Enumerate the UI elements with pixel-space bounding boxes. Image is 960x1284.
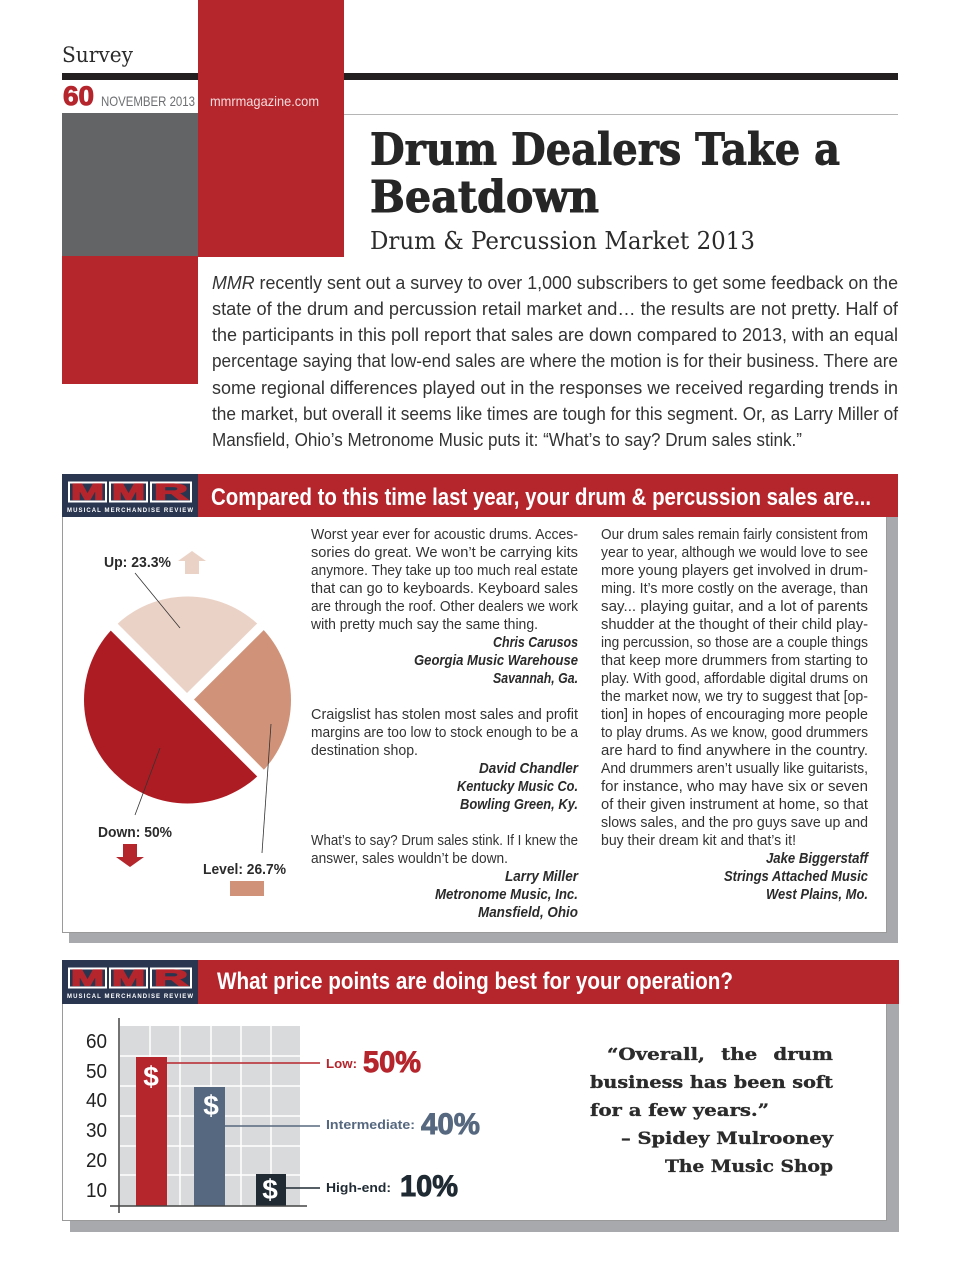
callout: low 50%: 50% (363, 1046, 421, 1079)
comment: Jake Biggerstaff: buy their dream kit and that’s it! (601, 832, 796, 849)
comment: Jake Biggerstaff: And drummers aren’t usually like guitarists, (601, 760, 868, 777)
callout: low 50% (167, 1046, 421, 1079)
bar: low (136, 1057, 167, 1206)
comment: David Chandler: destination shop. (311, 742, 418, 759)
pull quote: The Music Shop (665, 1157, 833, 1177)
label: down: Down: 50% (98, 824, 172, 841)
comment: Jake Biggerstaff (601, 526, 870, 903)
comment: Larry Miller: Metronome Music, Inc. (435, 886, 578, 903)
panel shadow (69, 517, 898, 943)
comment: David Chandler: Craigslist has stolen most sales and profit (311, 706, 579, 723)
comment: Larry Miller: What’s to say? Drum sales stink. If I knew the (311, 832, 578, 849)
panel box (62, 474, 886, 932)
comment: Jake Biggerstaff: say... playing guitar, and a lot of parents (601, 598, 868, 615)
section label: Survey: Survey (62, 43, 133, 67)
comment: David Chandler: Bowling Green, Ky. (460, 796, 578, 813)
comment: Jake Biggerstaff: more young players get involved in drum- (601, 562, 868, 579)
callout: high-end 10% (286, 1170, 458, 1203)
bar: high-end: $ (262, 1174, 278, 1205)
title (370, 124, 840, 223)
comment: Jake Biggerstaff: tion] in hopes of encouraging more people (601, 706, 868, 723)
comment: Chris Carusos: Savannah, Ga. (493, 670, 578, 687)
comment: Larry Miller: answer, sales wouldn’t be down. (311, 850, 508, 867)
heading bar (198, 474, 898, 517)
comment: Jake Biggerstaff: of their given instrument at home, so that (601, 796, 869, 813)
axis labels: 60 (86, 1031, 107, 1053)
comment: Jake Biggerstaff: Strings Attached Music (724, 868, 869, 885)
intro paragraph: the market, but overall it seems like times are tough for this segment. Or, as Larry Miller of (212, 403, 899, 424)
decorative block: tall red with website (198, 0, 344, 257)
MMR logo: M (112, 480, 145, 504)
pull quote (590, 1045, 834, 1177)
intro paragraph: the participants in this poll report that sales are down compared to 2013, with an equal (212, 324, 898, 345)
pull quote: “Overall, the drum (607, 1045, 833, 1065)
MMR logo: M (71, 966, 104, 990)
label: level: Level: 26.7% (203, 861, 286, 878)
axis labels: 40 (86, 1090, 107, 1112)
MMR logo: MUSICAL MERCHANDISE REVIEW (67, 994, 193, 1000)
decorative block: gray (62, 113, 198, 256)
title: Beatdown (370, 172, 599, 223)
MMR logo (62, 474, 198, 517)
comment: Jake Biggerstaff: ing percussion, so those are a couple things (601, 634, 868, 651)
bar chart (86, 1018, 307, 1213)
panel shadow (70, 1004, 899, 1232)
MMR logo: M (112, 966, 145, 990)
comment: Jake Biggerstaff: to play drums. As we know, good drummers (601, 724, 868, 741)
comment: Chris Carusos: Chris Carusos (493, 634, 578, 651)
label: down (98, 748, 172, 867)
comment: Larry Miller (311, 832, 579, 921)
intro paragraph: state of the drum and percussion retail market and… the results are not pretty. Half of (212, 298, 899, 319)
pull quote: business has been soft (590, 1073, 833, 1093)
hairline under header (344, 114, 898, 115)
intro paragraph: percentage saying that low-end sales are where the motion is for their business. There are (212, 350, 898, 371)
MMR logo: M (71, 480, 104, 504)
comment: David Chandler: David Chandler (479, 760, 579, 777)
MMR logo: R (154, 966, 188, 990)
comment: Jake Biggerstaff: year to year, although we would love to see (601, 544, 868, 561)
intro paragraph (212, 272, 899, 450)
comment: Jake Biggerstaff: the market now, we try to suggest that [op- (601, 688, 868, 705)
comment: David Chandler (311, 706, 579, 813)
label: level (203, 724, 286, 896)
pie chart (84, 596, 291, 804)
callout: high-end 10%: High-end: (326, 1180, 391, 1195)
callout: low 50%: Low: (326, 1056, 357, 1071)
panel box (62, 1000, 886, 1220)
comment: David Chandler: Kentucky Music Co. (457, 778, 578, 795)
comment: Jake Biggerstaff: slows sales, and the pro guys save up and (601, 814, 868, 831)
intro paragraph: some regional differences played out in the responses we received regarding trends in (212, 377, 898, 398)
panel: sales compared to last year (62, 474, 898, 943)
axis labels: 10 (86, 1180, 107, 1202)
issue date: NOVEMBER 2013 (101, 93, 195, 109)
label: up: Up: 23.3% (104, 554, 171, 571)
comment: Jake Biggerstaff: West Plains, Mo. (766, 886, 868, 903)
panel: price points (62, 960, 899, 1232)
axes (110, 1018, 307, 1213)
bar: high-end (256, 1174, 286, 1206)
MMR logo: R (154, 480, 188, 504)
comment: Chris Carusos: with pretty much say the same thing. (310, 616, 538, 633)
callout: intermediate 40%: 40% (421, 1108, 480, 1141)
comment: Chris Carusos: sories do great. We won’t be carrying kits (311, 544, 578, 561)
comment: Jake Biggerstaff: for instance, who may have six or seven (601, 778, 868, 795)
pie slice: up (118, 596, 257, 693)
heading bar (198, 960, 899, 1004)
MMR logo: MUSICAL MERCHANDISE REVIEW (67, 508, 193, 514)
header rule (62, 73, 898, 80)
callout: intermediate 40% (225, 1108, 480, 1141)
comment: Jake Biggerstaff: that keep more drummers from starting to (601, 652, 868, 669)
axis labels: 20 (86, 1150, 107, 1172)
comment: Jake Biggerstaff: Our drum sales remain fairly consistent from (601, 526, 868, 543)
axis labels: 30 (86, 1120, 107, 1142)
label: up (104, 551, 206, 628)
decorative block: tall red with website: mmrmagazine.com (210, 93, 319, 109)
axis labels (86, 1031, 107, 1202)
comment: Jake Biggerstaff: Jake Biggerstaff (766, 850, 870, 867)
title: Drum Dealers Take a (370, 124, 840, 176)
comment: Larry Miller: Larry Miller (505, 868, 579, 885)
callout: intermediate 40%: Intermediate: (326, 1117, 415, 1132)
callout: high-end 10%: 10% (400, 1170, 458, 1203)
decorative block: lower red (62, 256, 198, 384)
comment: Chris Carusos: are through the roof. Other dealers we work (311, 598, 578, 615)
comment: Jake Biggerstaff: are hard to find anywhere in the country. (601, 742, 868, 759)
bar: intermediate: $ (203, 1090, 219, 1121)
comment: Larry Miller: Mansfield, Ohio (478, 904, 578, 921)
comment: Chris Carusos: anymore. They take up too much real estate (311, 562, 578, 579)
subtitle: Drum & Percussion Market 2013 (370, 227, 755, 255)
pull quote: for a few years.” (590, 1101, 769, 1121)
heading bar: What price points are doing best for your operation? (217, 968, 733, 995)
comment: Chris Carusos: Georgia Music Warehouse (414, 652, 578, 669)
comment: Chris Carusos: Worst year ever for acoustic drums. Acces- (311, 526, 578, 543)
comment: Jake Biggerstaff: play. With good, affordable digital drums on (601, 670, 868, 687)
comment: David Chandler: margins are too low to stock enough to be a (311, 724, 579, 741)
bar: low: $ (143, 1061, 159, 1092)
comment: Chris Carusos (310, 526, 578, 687)
intro paragraph: MMR recently sent out a survey to over 1,000 subscribers to get some feedback on the (212, 272, 898, 293)
pie slice: level (194, 630, 291, 770)
comment: Chris Carusos: that can go to keyboards. Keyboard sales (311, 580, 578, 597)
comment: Jake Biggerstaff: shudder at the thought of their child play- (601, 616, 868, 633)
pull quote: – Spidey Mulrooney (621, 1129, 834, 1149)
pie slice: down (84, 630, 258, 804)
MMR logo (62, 960, 198, 1004)
page number: 60 (63, 81, 94, 111)
comment: Jake Biggerstaff: ming. It’s more costly on the average, than (601, 580, 868, 597)
bar: intermediate (194, 1087, 225, 1206)
intro paragraph: Mansfield, Ohio’s Metronome Music puts it: “What’s to say? Drum sales stink.” (212, 429, 802, 450)
axis labels: 50 (86, 1061, 107, 1083)
